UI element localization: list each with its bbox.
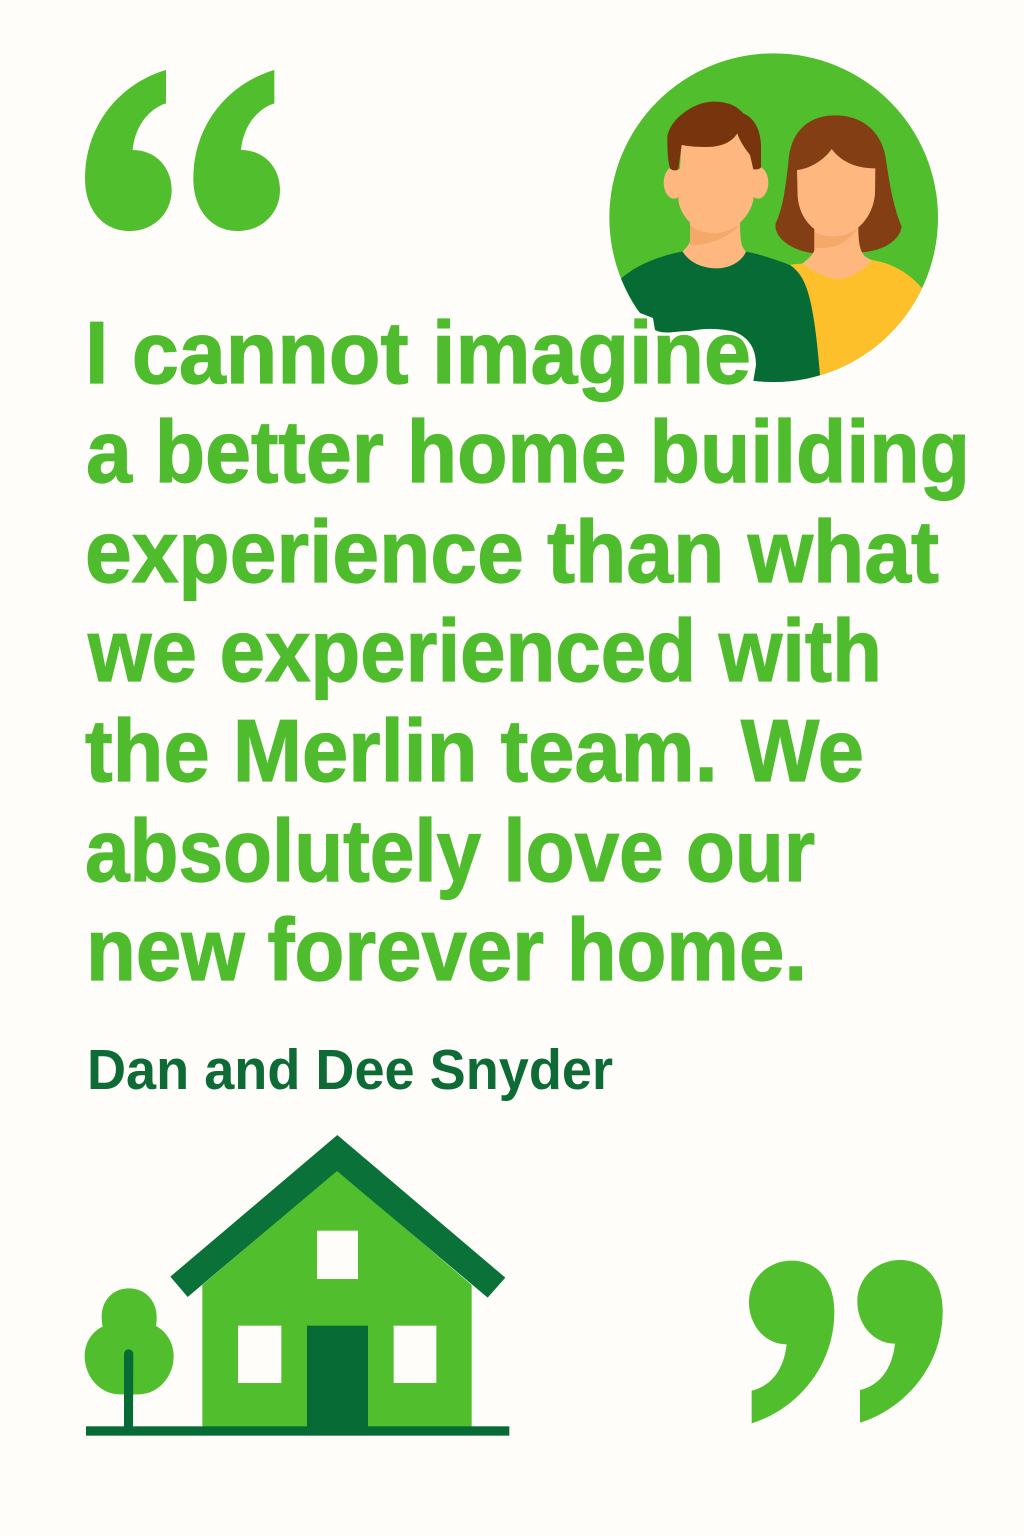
icon: opening quotation mark [85,70,280,231]
icon: house body [202,1170,472,1428]
quote text [85,303,970,999]
icon: door [307,1326,368,1429]
icon: upper window [317,1231,358,1279]
ground line [86,1426,509,1436]
quote line 6: absolutely love our [85,801,815,900]
icon: house and tree [85,1135,509,1436]
icon: roof [170,1135,505,1298]
quote line 3: experience than what [85,502,939,601]
quote line 5: the Merlin team. We [85,701,864,800]
icon: right window [394,1326,436,1383]
icon: closing quotation mark [749,1260,943,1423]
attribution: Dan and Dee Snyder [87,1038,613,1102]
quote line 2: a better home building [86,402,970,501]
cutout behind quote text over portrait [620,298,756,400]
icon: left window [238,1326,281,1383]
quote line 4: we experienced with [87,601,882,700]
quote line 1: I cannot imagine [85,303,751,402]
quote line 7: new forever home. [86,900,807,999]
icon: tree [85,1288,174,1428]
icon: couple portrait [609,53,938,387]
